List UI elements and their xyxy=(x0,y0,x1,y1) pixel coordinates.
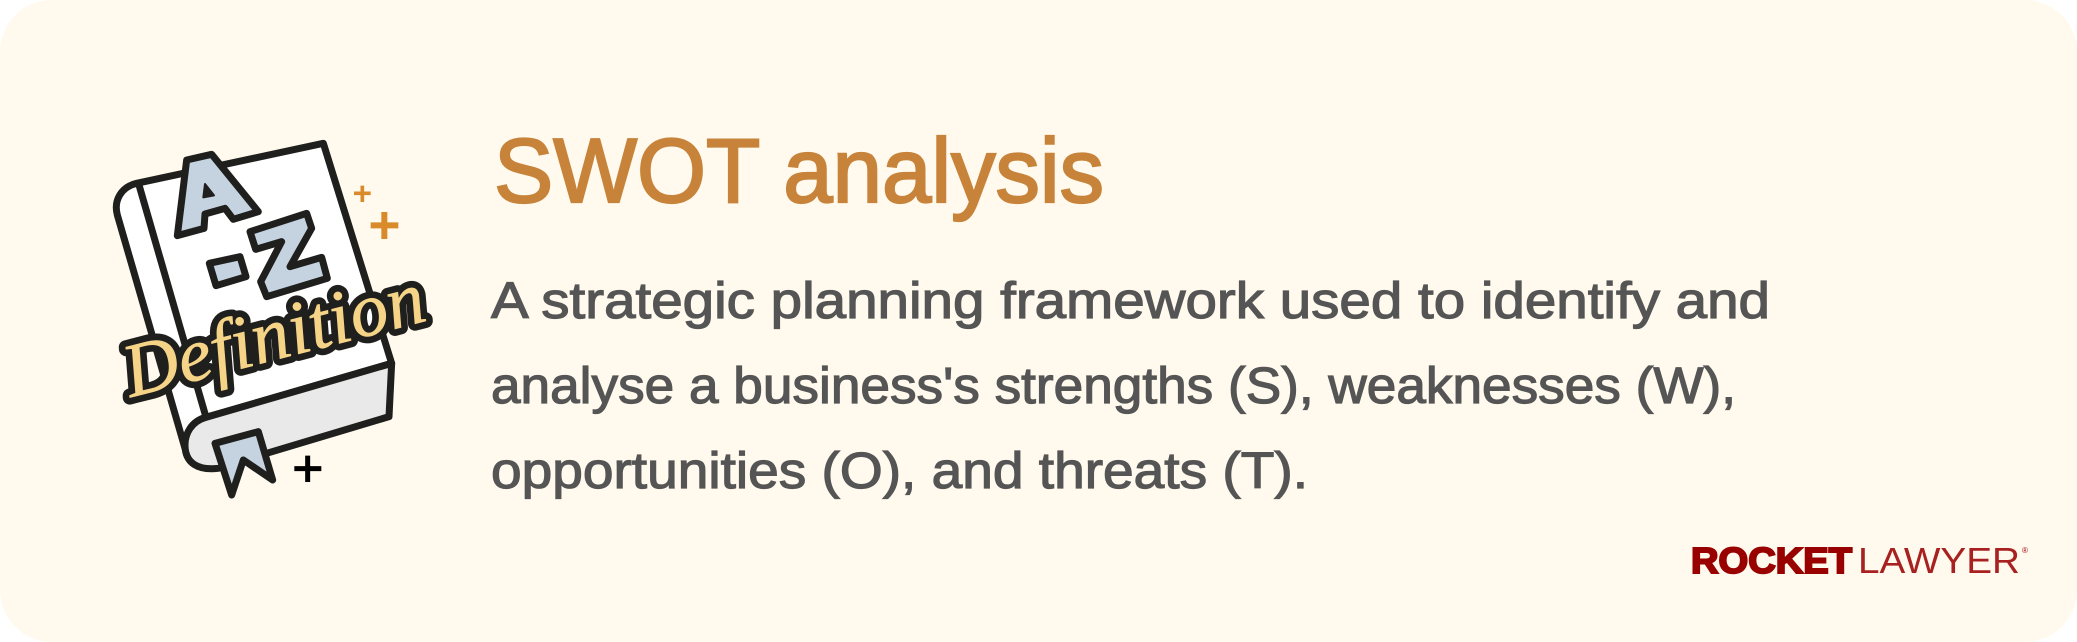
logo word: LAWYER: LAWYER xyxy=(1858,540,2020,581)
logo registered mark: ® xyxy=(2022,546,2028,555)
sparkle: large orange plus xyxy=(371,212,398,239)
sparkle: black plus xyxy=(294,456,321,482)
letter dash xyxy=(209,257,246,286)
book spine line xyxy=(139,185,206,416)
sparkle: small orange plus xyxy=(354,186,371,202)
definition line 2: analyse a business's strengths (S), weaknesses (W), xyxy=(491,357,1736,414)
title: SWOT analysis xyxy=(494,121,1104,222)
definition text block xyxy=(491,272,1770,499)
script word: Definition: Definition xyxy=(113,255,433,414)
book cover xyxy=(116,143,392,448)
letter Z xyxy=(250,213,327,297)
logo: Rocket Lawyer xyxy=(1691,540,2028,581)
letter A xyxy=(177,154,258,236)
definition line 3: opportunities (O), and threats (T). xyxy=(491,442,1308,499)
definition line 1: A strategic planning framework used to identify and xyxy=(491,272,1770,329)
logo word: ROCKET: ROCKET xyxy=(1691,540,1852,581)
bookmark ribbon xyxy=(215,432,273,495)
icon: definition book xyxy=(113,143,433,495)
book pages xyxy=(185,363,392,469)
script word: Definition: Definition xyxy=(113,255,433,414)
